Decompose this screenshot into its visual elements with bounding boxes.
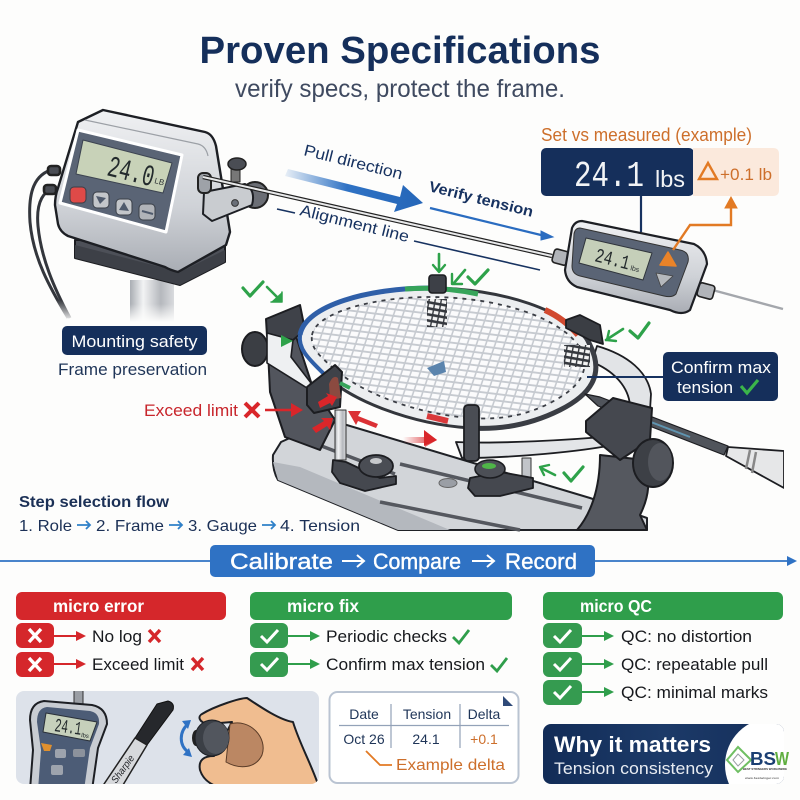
heading: Why it matters [554,732,711,757]
right block [586,398,652,460]
leader line [366,751,392,765]
hand turning knob [181,698,320,790]
table headers: Delta [468,706,501,722]
flow steps [19,518,360,535]
table headers [349,706,501,722]
table row [343,731,498,747]
banner: calibrate compare record: Calibrate [230,549,333,574]
alignment line [277,202,540,270]
orange arrow [673,206,731,250]
top clamp hatch [427,299,447,327]
meter LCD [579,238,652,280]
delta triangle [699,163,717,179]
meter body [565,221,707,313]
top clamp [429,275,446,293]
panel: tools illustration [16,690,320,790]
table row: +0.1 [470,731,498,747]
panel: why it matters [543,724,789,784]
flow heading: Step selection flow [19,494,170,511]
device clamp [242,182,268,208]
left small clamp [307,365,342,413]
label: exceed limit [144,401,303,420]
alignment line: Alignment line [298,202,411,246]
handheld meter [30,690,107,790]
row: periodic checks [250,623,469,648]
panel: log table [330,692,518,783]
header [16,592,226,620]
bottom band [456,436,618,458]
left pin mount [332,460,396,491]
base plate [273,420,647,530]
dark frame section [470,322,596,428]
delta panel [693,148,779,196]
delta value: +0.1 lb [720,165,772,184]
row: repeatable pull [543,652,768,677]
panel: micro fix: micro fix [287,596,359,616]
table headers: Date [349,706,379,722]
green knob [475,460,505,478]
label: confirm max tension: tension [677,378,733,397]
divider arrow [0,556,797,566]
banner: calibrate compare record [210,545,595,577]
row: exceed limit [16,652,203,677]
red frame section [545,310,578,335]
row: no distortion [543,623,752,648]
device body [55,110,230,272]
blue frame section [300,288,430,335]
header [250,592,512,620]
measured panel [541,148,694,196]
panel: micro QC: micro QC [580,596,652,616]
right stand [577,455,648,530]
row: periodic checks: Periodic checks [326,627,447,646]
logo: BSW: www.bestwinger.com [745,776,780,780]
logo: BSW [727,747,789,780]
label: mounting safety [62,326,293,355]
illustration: stringing machine [242,275,800,530]
bottom clamp [464,405,479,461]
row: minimal marks: QC: minimal marks [621,683,768,702]
right clamp [566,315,603,344]
illustration: tension head device [30,110,268,322]
panel: micro QC [543,592,783,705]
subtitle: verify specs, protect the frame. [235,75,565,103]
row: confirm max tension [250,652,507,677]
shaft [585,394,728,455]
illustration: tension head device: LB [154,176,165,187]
callout heading: Set vs measured (example) [541,125,752,145]
bottom post [522,458,531,478]
row: no log [16,623,160,648]
device LCD [76,140,172,193]
left stand [267,327,335,450]
tuning knob [192,730,196,746]
table headers: Tension [403,706,451,722]
left pin knob [359,455,393,477]
callout: set vs measured [541,125,779,250]
label: confirm max tension [587,352,778,401]
banner: calibrate compare record: Record [505,549,577,574]
label: mounting safety: Mounting safety [72,332,198,351]
device pole [130,280,174,322]
panel: micro fix [250,592,512,677]
left pin [335,410,346,460]
check group: upper left [243,282,282,302]
example delta: Example delta [396,757,505,774]
panel: micro error: micro error [53,596,144,616]
bottom mount [468,472,533,496]
logo: BSW: BS [750,749,776,769]
row: no log: No log [92,627,142,646]
left knob [242,332,268,366]
device bezel [60,130,182,232]
table row: 24.1 [412,731,440,747]
step selection flow [19,494,360,535]
device reading: 24.0 [104,152,157,196]
label: frame preservation: Frame preservation [58,360,207,379]
panel: micro error [16,592,226,677]
green frame section [405,288,478,294]
right clamp hatch [564,345,590,367]
label: exceed limit: Exceed limit [144,401,238,420]
left arm [267,333,311,388]
damper [427,361,446,376]
flow steps: 4. Tension [280,518,360,535]
device base [75,240,225,285]
flow steps: 3. Gauge [188,518,257,535]
right band [592,346,651,410]
green checks and arrows [243,254,649,481]
row: confirm max tension: Confirm max tension [326,655,485,674]
flow steps: 1. Role [19,518,72,535]
inline meter [551,221,783,313]
rod [203,177,552,256]
row: repeatable pull: QC: repeatable pull [621,655,768,674]
measured value: 24.1 [574,156,644,197]
label: verify tension: Verify tension [427,178,535,221]
red arrows [312,393,437,447]
check group: lower [540,465,583,481]
title: Proven Specifications [200,30,600,72]
subheading: Tension consistency [554,760,714,778]
arrow: verify tension [430,208,553,240]
meter reading: 24.1 [592,245,632,276]
right knob [633,439,673,487]
row: minimal marks [543,680,768,705]
arrow: pull direction [285,169,423,212]
check group: right clamp [606,323,649,341]
device cables [30,166,70,318]
handle [726,447,784,488]
table row: Oct 26 [343,731,385,747]
unit: lbs [655,166,685,192]
marker pen: Sharpie [110,753,137,786]
logo: BSW: W [775,749,789,769]
connector [640,195,642,232]
device buttons [70,187,155,220]
flow arrows [77,521,275,529]
inline meter: lbs [630,265,640,274]
marker pen [100,701,173,790]
meter warning icon [660,252,676,266]
corner fold [503,696,513,706]
banner: calibrate compare record: Compare [373,549,461,574]
flow steps: 2. Frame [96,518,164,535]
check group: top clamp [433,254,488,284]
handheld meter: 24.1 [53,715,83,741]
racket frame [300,288,596,428]
header [543,592,783,620]
racket strings [312,297,584,418]
row: exceed limit: Exceed limit [92,655,184,674]
row: no distortion: QC: no distortion [621,627,752,646]
label: confirm max tension: Confirm max [671,358,772,377]
logo: BSW: BEST STRINGERS WORLDWIDE [743,767,787,771]
handheld meter: lbs [81,733,89,740]
table grid [339,704,509,748]
label: pull direction: Pull direction [302,142,404,183]
rotate arrow [181,724,188,752]
